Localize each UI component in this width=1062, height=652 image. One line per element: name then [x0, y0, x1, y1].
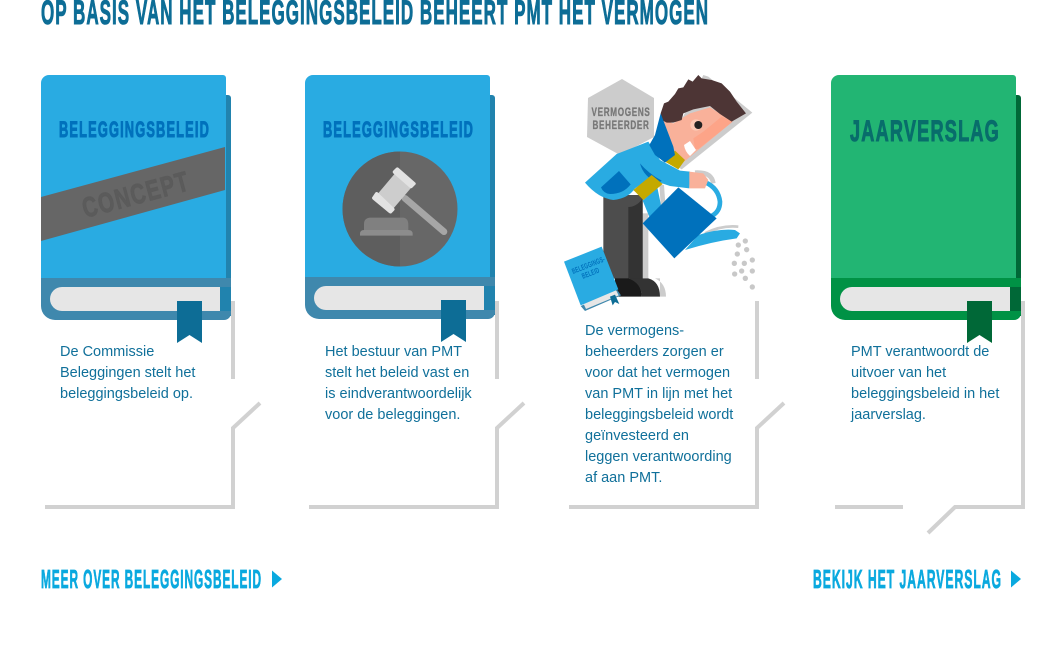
panel: jaarverslag: [831, 75, 1023, 533]
text: vermogensbeheerders: De vermogens-: [585, 323, 684, 339]
icon: gavel: [342, 152, 458, 266]
badge: vermogensbeheerder: VERMOGENS: [592, 105, 650, 119]
text: bestuur: [325, 344, 472, 423]
water drops: [732, 238, 755, 290]
text: jaarverslag: uitvoer van het: [851, 365, 946, 381]
text: vermogensbeheerders: voor dat het vermogen: [585, 365, 730, 381]
jacket and watering can: [585, 113, 740, 258]
panel: bestuur: [305, 75, 524, 507]
text: vermogensbeheerders: geïnvesteerd en: [585, 428, 689, 444]
text: jaarverslag: PMT verantwoordt de: [851, 344, 989, 360]
text: bestuur: voor de beleggingen.: [325, 407, 460, 423]
small book: BELEID: [580, 266, 601, 281]
book: beleggingsbeleid gavel: [305, 75, 495, 342]
text: bestuur: is eindverantwoordelijk: [325, 386, 472, 402]
text: vermogensbeheerders: af aan PMT.: [585, 470, 662, 486]
text: vermogensbeheerders: beheerders zorgen er: [585, 344, 724, 360]
badge: vermogensbeheerder: [587, 79, 654, 155]
book: beleggingsbeleid gavel: BELEGGINGSBELEID: [323, 117, 474, 142]
text: commissie: Beleggingen stelt het: [60, 365, 195, 381]
book: beleggingsbeleid concept: CONCEPT: [79, 165, 193, 224]
head: [661, 75, 752, 169]
book: beleggingsbeleid concept: [41, 75, 231, 343]
text: vermogensbeheerders: [585, 323, 733, 486]
text: commissie: [60, 344, 195, 402]
speech bubble 1: [45, 301, 260, 507]
text: vermogensbeheerders: leggen verantwoording: [585, 449, 732, 465]
text: jaarverslag: [850, 344, 999, 423]
illustration: person watering: [564, 75, 755, 311]
small book: BELEGGINGS-: [570, 254, 606, 276]
book: jaarverslag: [831, 75, 1021, 343]
small book: [564, 247, 621, 311]
text: MEER OVER BELEGGINGSBELEID: [41, 564, 262, 594]
text: bestuur: Het bestuur van PMT: [325, 344, 462, 360]
book: beleggingsbeleid concept: BELEGGINGSBELEID: [59, 117, 210, 142]
text: commissie: beleggingsbeleid op.: [60, 386, 193, 402]
text: commissie: De Commissie: [60, 344, 154, 360]
badge: vermogensbeheerder: BEHEERDER: [592, 118, 650, 132]
speech bubble 3: [569, 301, 784, 507]
panel: commissie beleggingen: [41, 75, 260, 507]
speech bubble 4: [835, 301, 1023, 533]
panel: vermogensbeheerder: [564, 75, 784, 507]
text: jaarverslag: jaarverslag.: [850, 407, 926, 423]
text: bestuur: stelt het beleid vast en: [325, 365, 469, 381]
text: vermogensbeheerders: beleggingsbeleid wordt: [585, 407, 733, 423]
text: vermogensbeheerders: van PMT in lijn met het: [585, 386, 732, 402]
legs and shoes: [603, 195, 666, 297]
speech bubble 2: [309, 301, 524, 507]
link: meer over beleggingsbeleid: [41, 564, 282, 594]
text: jaarverslag: beleggingsbeleid in het: [851, 386, 999, 402]
